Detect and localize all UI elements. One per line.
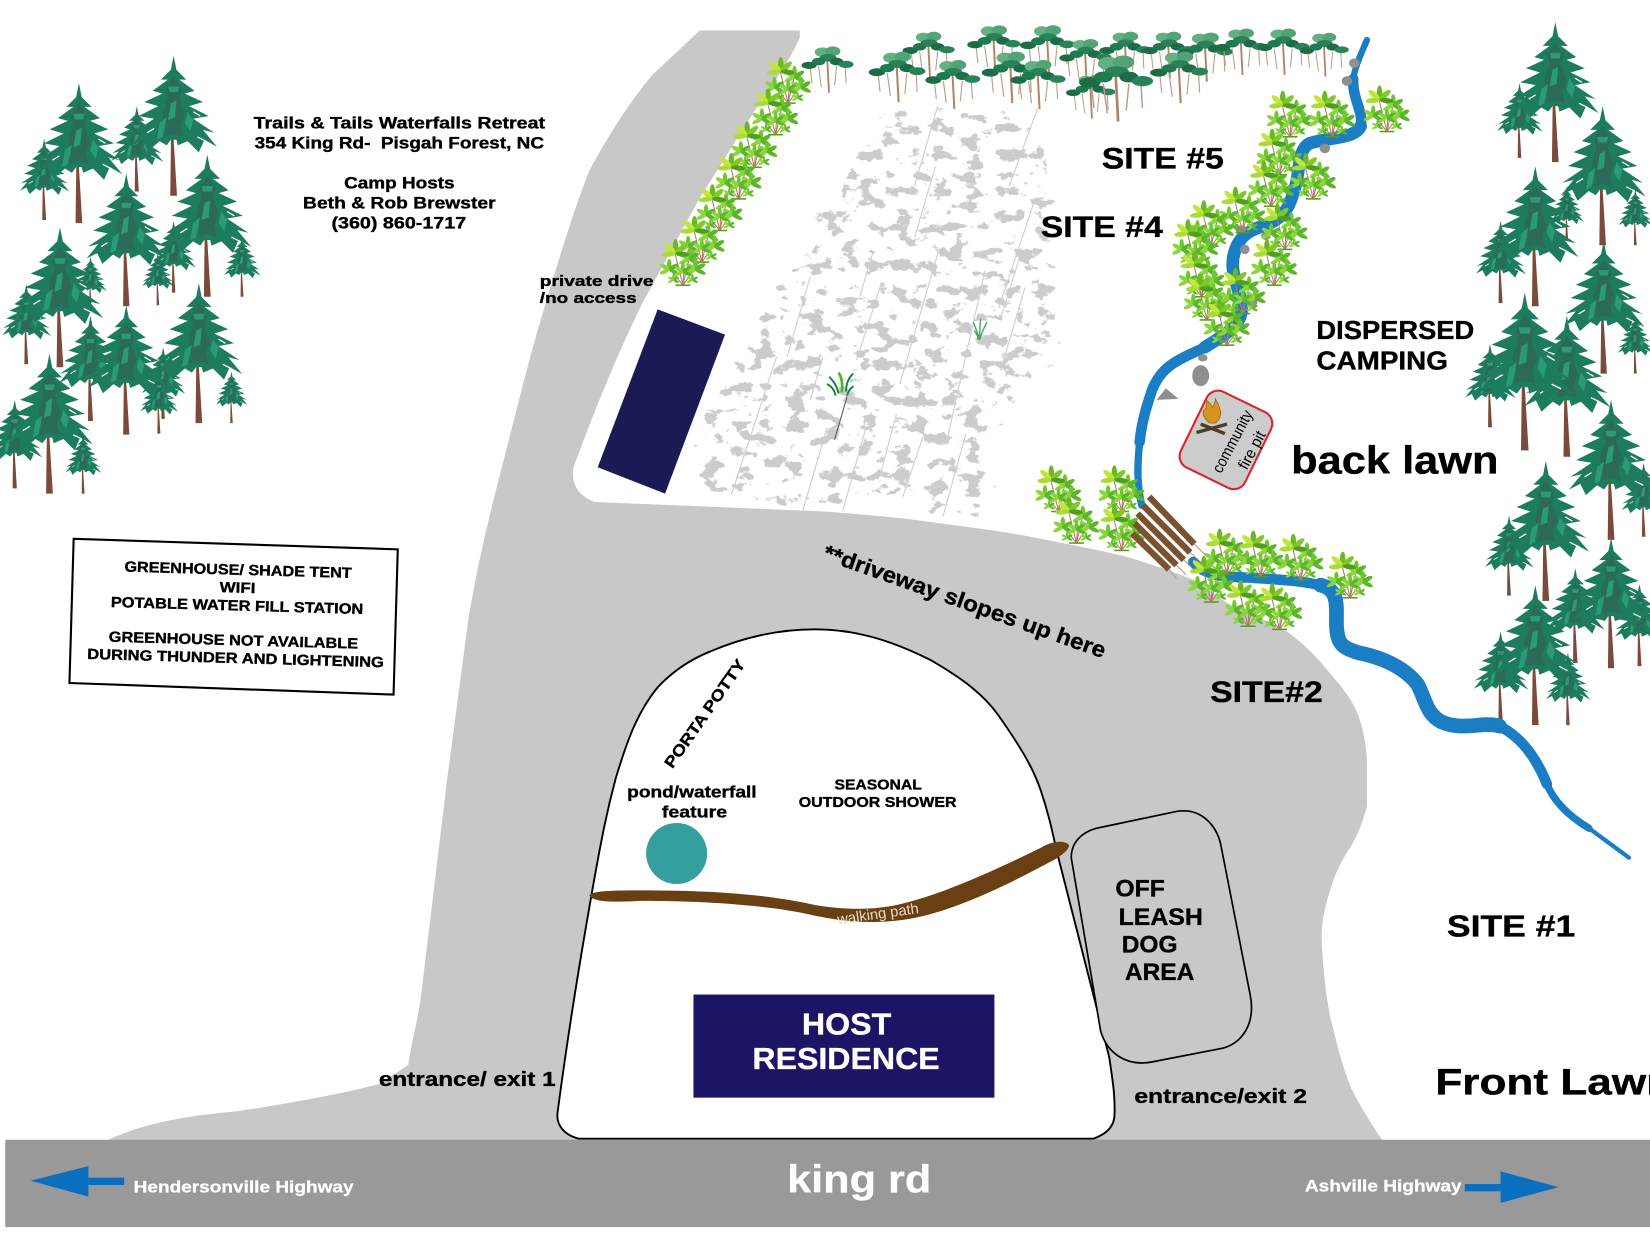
private drive label: private drive [540,274,653,290]
king rd label: king rd [787,1158,931,1201]
title block [254,113,546,232]
walking path [589,842,1069,928]
right pine forest [1465,22,1650,725]
off leash dog area: OFF [1115,876,1165,903]
dispersed camping label [1316,315,1474,375]
speckled gray field [668,100,1068,526]
greenhouse info box: GREENHOUSE/ SHADE TENT [124,560,352,582]
entrance 2 label: entrance/exit 2 [1134,1086,1307,1108]
shower label: SEASONAL [834,777,922,793]
pond label: pond/waterfall [627,783,757,802]
greenhouse info box [69,539,398,695]
left pine forest [0,56,261,494]
shrubs near log bridge [1035,465,1374,629]
host residence [693,995,994,1098]
pond [646,823,707,884]
site 2 label: SITE#2 [1210,676,1323,709]
front lawn label: Front Lawn [1435,1062,1650,1103]
off leash dog area: AREA [1125,959,1194,986]
Ashville Highway label: Ashville Highway [1305,1176,1462,1195]
shrubs along creek [1171,86,1410,345]
pond label: feature [662,803,727,822]
arrow: right to Ashville [1465,1171,1558,1203]
host property lawn outline [557,629,1115,1139]
creek [1138,40,1629,858]
title block: Beth & Rob Brewster [303,193,496,212]
title block: Camp Hosts [344,173,455,192]
greenhouse info box: WIFI [219,580,256,597]
site 5 label: SITE #5 [1102,142,1224,175]
fire pit label: fire pit: fire pit [1235,428,1270,473]
log bridge [1132,497,1206,579]
shrubs along driveway [659,57,812,285]
icon: campfire [1196,399,1227,434]
private drive label [540,274,653,307]
king rd road band [5,1140,1650,1227]
gravel driveway [108,31,1383,1141]
private drive label: /no access [540,291,637,307]
off leash dog area [1071,811,1251,1063]
greenhouse rectangle [598,309,725,494]
back lawn label: back lawn [1291,440,1498,483]
title block: 354 King Rd- Pisgah Forest, NC [255,133,544,152]
grass tuft small [973,319,987,340]
walking path label: walking path [835,901,920,928]
host residence: RESIDENCE [752,1042,940,1076]
top row of small trees [802,25,1349,121]
grass tuft large [827,373,853,440]
off leash dog area: DOG [1122,931,1178,958]
fire pit label: community: community [1210,408,1257,476]
porta potty label: PORTA POTTY [662,656,750,772]
site 1 label: SITE #1 [1447,910,1575,944]
pond label [627,783,757,822]
dispersed camping label: DISPERSED [1316,315,1474,345]
driveway slope note: **driveway slopes up here [820,540,1109,663]
greenhouse info box: POTABLE WATER FILL STATION [111,595,364,618]
title block: (360) 860-1717 [331,213,466,232]
rocks along creek [1156,58,1360,400]
community fire pit sign [1175,386,1277,493]
dispersed camping label: CAMPING [1316,345,1448,375]
greenhouse info box: GREENHOUSE NOT AVAILABLE [109,630,359,653]
off leash dog area: LEASH [1119,904,1203,931]
host residence: HOST [802,1008,892,1042]
arrow: left to Hendersonville [31,1166,124,1197]
entrance 1 label: entrance/ exit 1 [379,1069,556,1091]
greenhouse info box: DURING THUNDER AND LIGHTENING [87,647,384,671]
Hendersonville Highway label: Hendersonville Highway [134,1177,354,1196]
site 4 label: SITE #4 [1041,211,1163,244]
title block: Trails & Tails Waterfalls Retreat [254,113,546,132]
shower label: OUTDOOR SHOWER [799,795,957,811]
shower label [799,777,957,811]
